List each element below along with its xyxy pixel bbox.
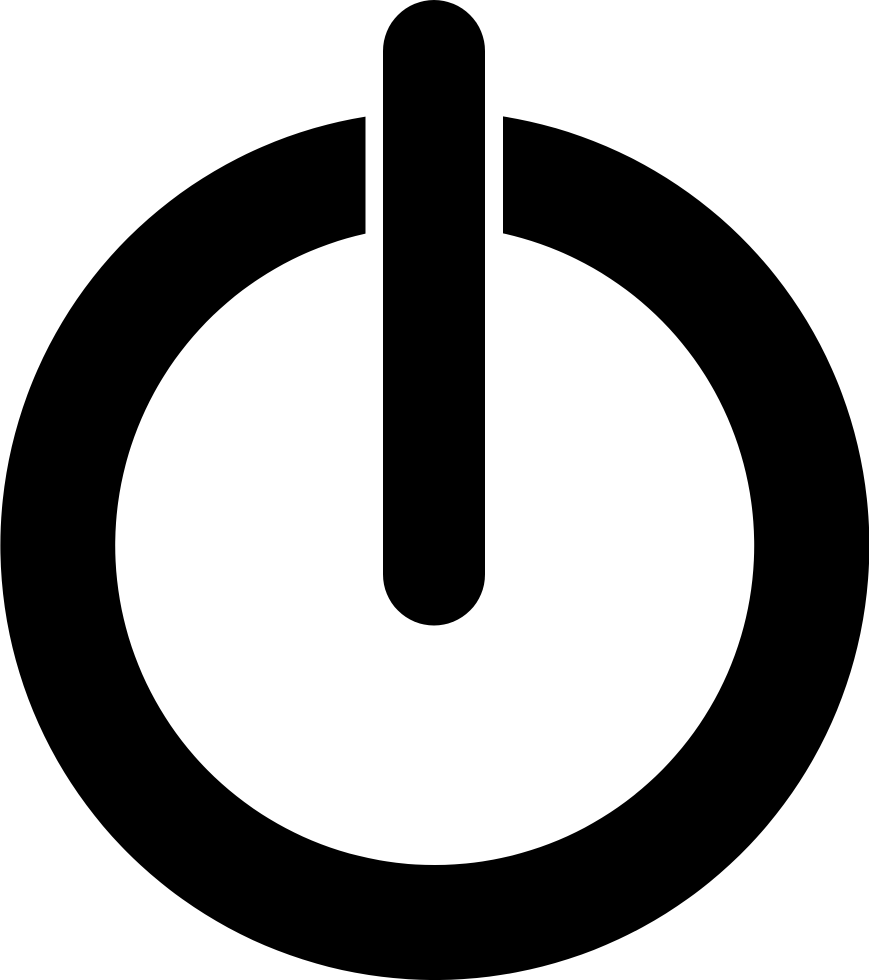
power bar (383, 0, 485, 626)
